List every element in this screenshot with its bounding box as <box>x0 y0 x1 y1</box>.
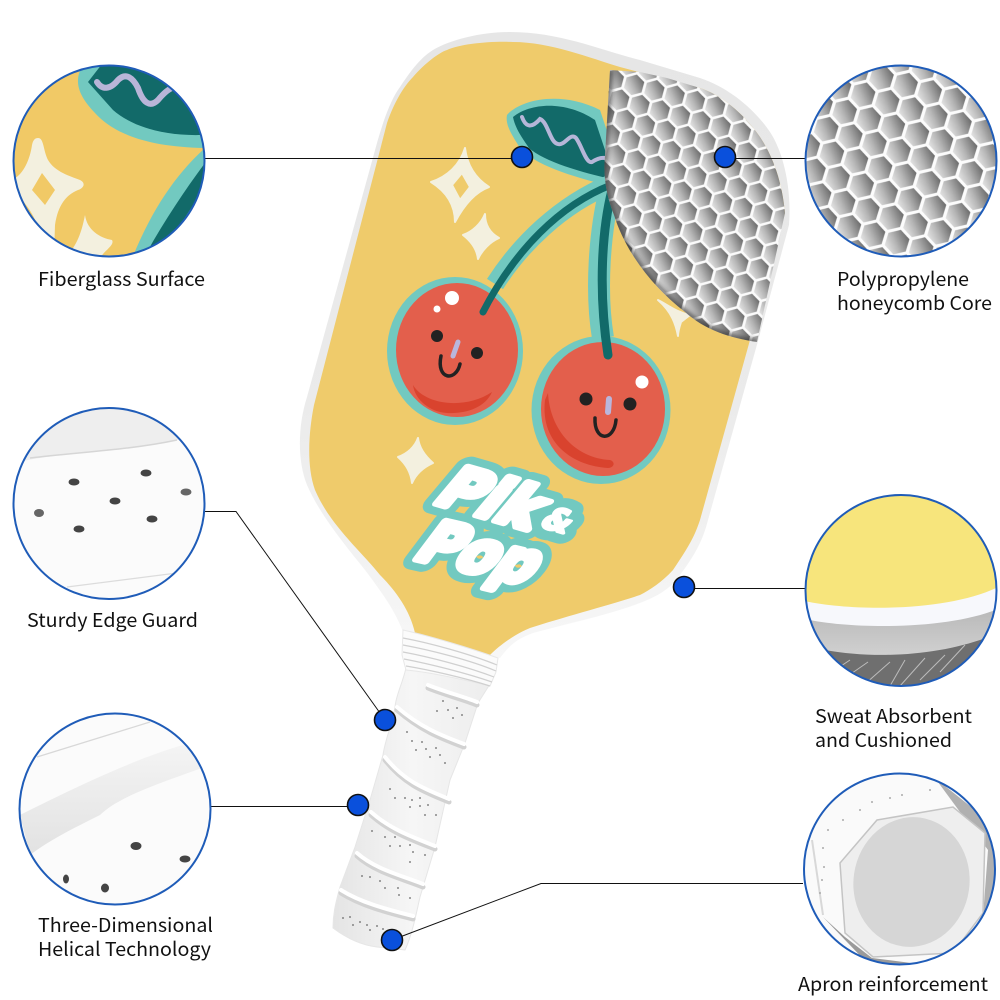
left cherry <box>387 277 523 425</box>
sparkles <box>398 148 690 483</box>
label: polypropylene honeycomb core: honeycomb Core <box>837 289 992 316</box>
brand logo: Pik & Pop: Pop <box>402 510 562 597</box>
cherry leaf <box>507 99 625 186</box>
label: polypropylene honeycomb core: Polypropylene <box>837 265 969 292</box>
label: sturdy edge guard: Sturdy Edge Guard <box>27 606 198 633</box>
brand logo: Pik & Pop: Pik <box>421 456 568 542</box>
brand logo: Pik & Pop: Pik <box>421 456 568 542</box>
marker dots <box>348 146 736 950</box>
connector: sturdy edge guard <box>205 512 385 720</box>
connector: honeycomb core <box>725 158 805 160</box>
pickleball paddle <box>300 32 795 950</box>
detail circle: apron reinforcement <box>800 770 1000 970</box>
brand logo: Pik & Pop: & <box>533 500 584 540</box>
exposed honeycomb core <box>604 70 785 342</box>
label: apron reinforcement: Apron reinforcement <box>798 970 988 997</box>
label: sweat absorbent and cushioned <box>815 702 972 753</box>
detail circle: helical technology <box>15 710 215 910</box>
detail circle: fiberglass surface <box>10 60 215 260</box>
paddle edge guard <box>300 32 790 658</box>
connector: sweat absorbent <box>684 588 805 590</box>
right cherry <box>532 336 670 484</box>
cherry stems <box>483 184 612 355</box>
connector: fiberglass surface <box>205 158 522 160</box>
label: three-dimensional helical technology: Helical Technology <box>38 935 211 962</box>
handle with grip tape <box>333 630 498 950</box>
brand logo: Pik & Pop: & <box>533 500 584 540</box>
brand logo: Pik & Pop: Pop <box>402 510 562 597</box>
detail circle: sweat absorbent edge <box>800 490 1000 690</box>
connector: apron reinforcement <box>392 884 803 940</box>
label: three-dimensional helical technology <box>38 911 213 962</box>
brand logo: Pik & Pop <box>402 456 584 597</box>
label: sweat absorbent and cushioned: Sweat Absorbent <box>815 702 972 729</box>
label: polypropylene honeycomb core <box>837 265 992 316</box>
label: fiberglass surface: Fiberglass Surface <box>38 265 205 292</box>
detail circle: sturdy edge guard <box>10 400 210 605</box>
label: sweat absorbent and cushioned: and Cushioned <box>815 726 952 753</box>
detail circle: honeycomb core <box>806 66 996 256</box>
paddle yellow face <box>309 42 785 655</box>
label: three-dimensional helical technology: Three-Dimensional <box>38 911 213 938</box>
connector: helical technology <box>211 806 358 808</box>
